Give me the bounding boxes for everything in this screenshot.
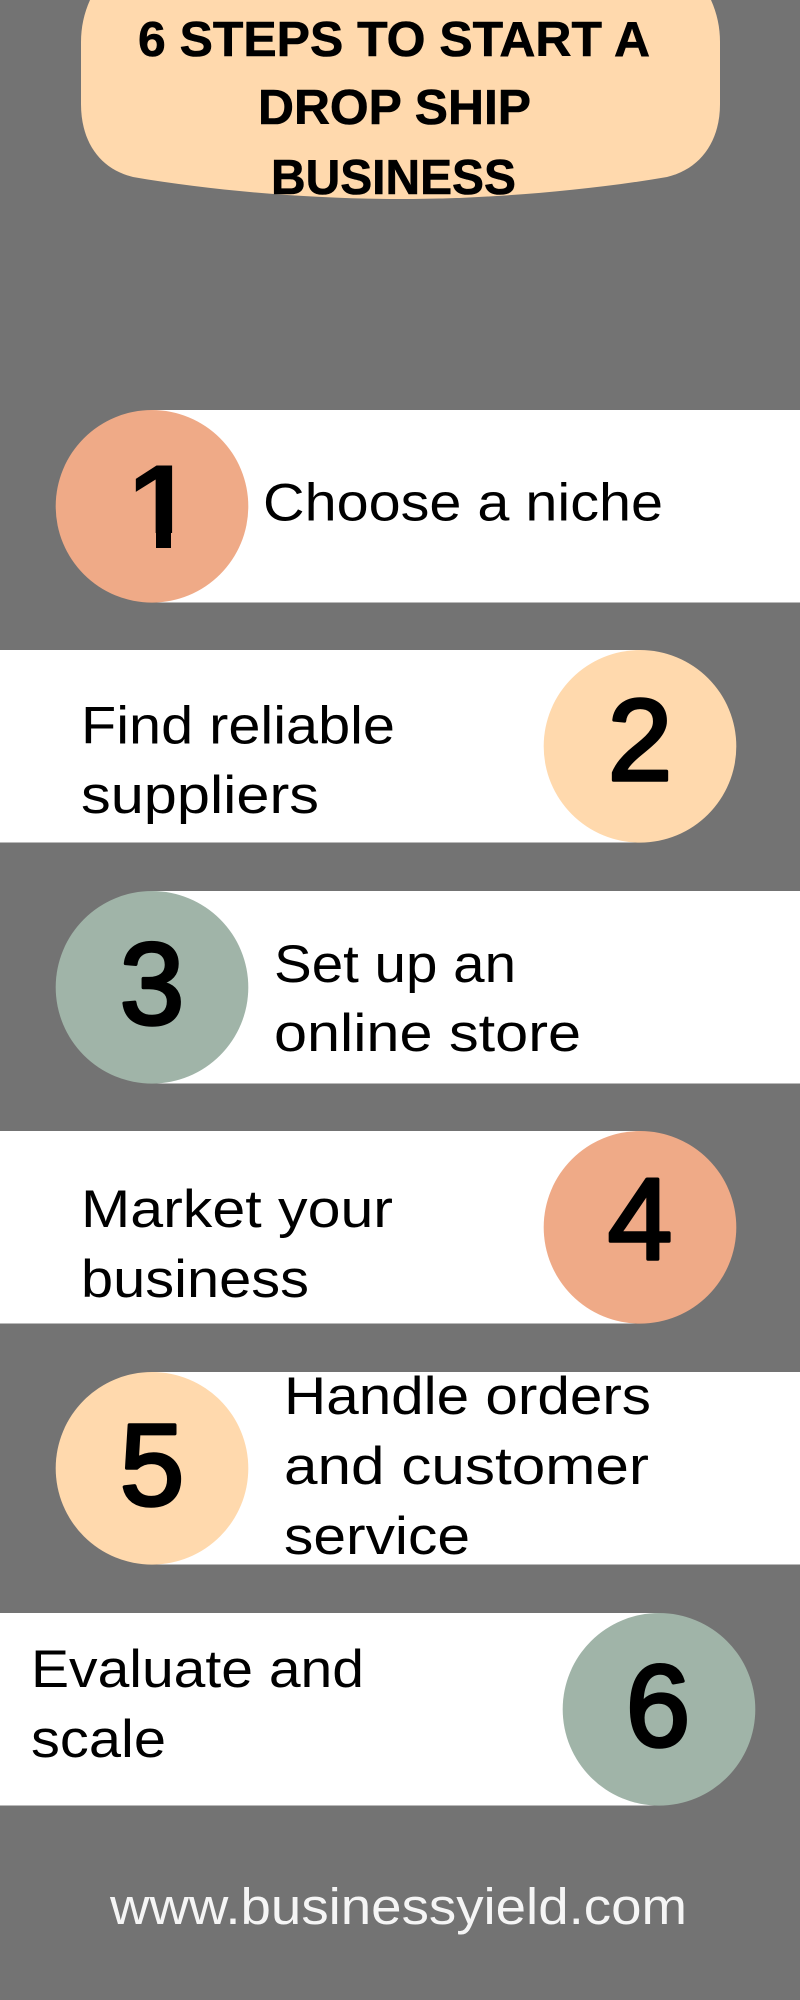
- step 6 band: [0, 1613, 659, 1806]
- header: title banner: [81, 0, 720, 205]
- title text: DROP SHIP: [258, 81, 531, 135]
- step 3 text: online store: [274, 1004, 581, 1063]
- step 4 band: [0, 1131, 640, 1324]
- step 6 panel: [0, 1613, 755, 1806]
- step 6 text: [31, 1640, 364, 1769]
- website footer: www.businessyield.com: [109, 1878, 687, 1935]
- title text: BUSINESS: [271, 151, 516, 205]
- step 3 number circle: 3: [120, 919, 184, 1049]
- step 1 text: Choose a niche: [263, 474, 663, 532]
- step 1 number circle: 1: [128, 440, 194, 574]
- step 4 panel: [0, 1131, 736, 1324]
- step 2 text: suppliers: [81, 766, 319, 825]
- step 6 number circle: [563, 1613, 755, 1806]
- step 2 band: [0, 650, 640, 842]
- step 6 text: scale: [31, 1710, 166, 1769]
- step 5 text: and customer: [284, 1437, 649, 1496]
- step 2 panel: [0, 650, 736, 843]
- step 3 band: [152, 891, 800, 1084]
- title background shape: [81, 0, 720, 199]
- step 3 text: [274, 935, 581, 1063]
- step 2 text: Find reliable: [81, 696, 395, 756]
- step 3 number circle: [56, 891, 248, 1084]
- step 5 number circle: [56, 1372, 248, 1565]
- step 3 text: Set up an: [274, 935, 516, 994]
- step 4 number circle: 4: [608, 1154, 672, 1284]
- step 1 band: [152, 410, 800, 602]
- step 4 text: Market your: [81, 1180, 393, 1239]
- step 1 panel: [56, 410, 800, 603]
- step 5 panel: [56, 1367, 800, 1566]
- title text: 6 STEPS TO START A: [138, 13, 650, 67]
- step 5 text: [284, 1367, 651, 1566]
- step 4 text: [81, 1180, 393, 1309]
- step 3 panel: [56, 891, 800, 1084]
- step 5 text: Handle orders: [284, 1367, 651, 1426]
- title text: [138, 13, 650, 205]
- step 2 text: [81, 696, 395, 825]
- step 5 text: service: [284, 1507, 470, 1566]
- step 5 band: [152, 1372, 800, 1564]
- step 2 number circle: [544, 650, 736, 843]
- step 6 number circle: 6: [626, 1641, 690, 1771]
- step 6 text: Evaluate and: [31, 1640, 364, 1699]
- step 1 number circle: [56, 410, 248, 603]
- step 5 number circle: 5: [120, 1400, 184, 1530]
- step 4 text: business: [81, 1250, 309, 1309]
- step 4 number circle: [544, 1131, 736, 1324]
- step 2 number circle: 2: [608, 675, 672, 805]
